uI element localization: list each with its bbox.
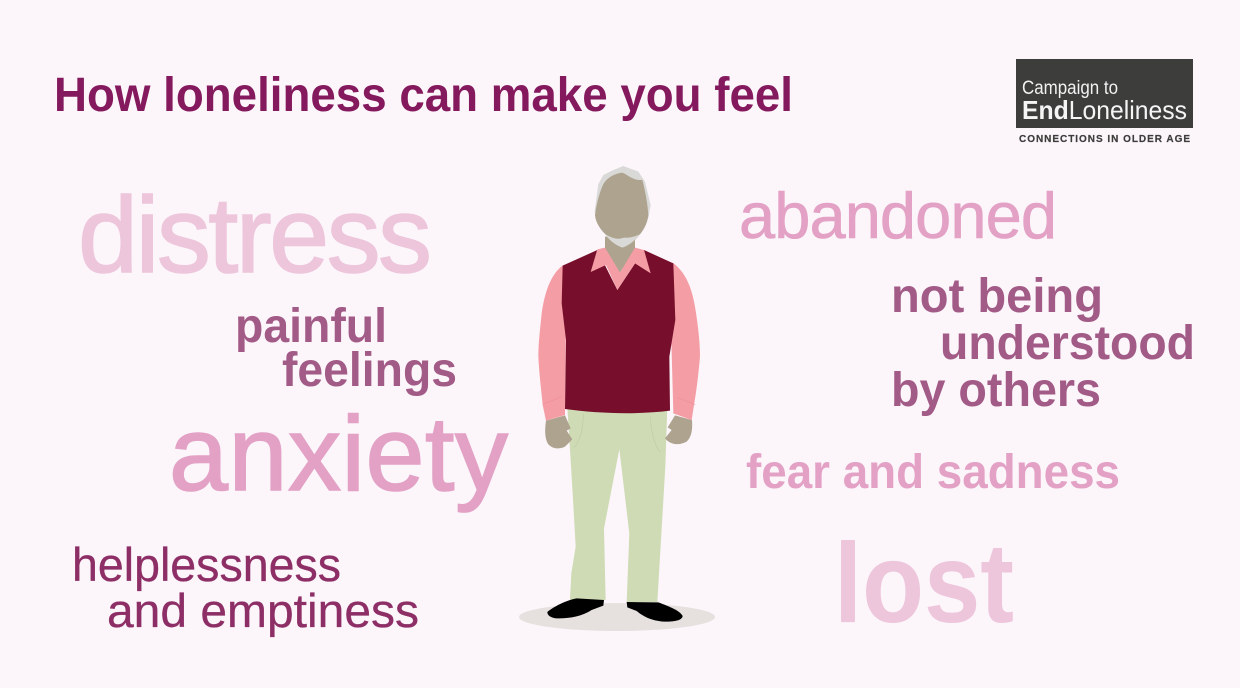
words: painful feelings [235, 300, 457, 397]
sweater vest [562, 250, 675, 413]
word: anxiety: anxiety [169, 395, 508, 513]
words: not being understood by others [891, 270, 1195, 417]
words: painful feelings: painful [235, 300, 387, 353]
hair [594, 166, 651, 218]
words: helplessness and emptiness: helplessness [72, 538, 341, 591]
words: painful feelings: feelings [282, 344, 457, 397]
ground shadow [519, 603, 715, 631]
word: abandoned: abandoned [739, 179, 1057, 252]
shirt collar [591, 248, 651, 290]
words: not being understood by others: not being [891, 270, 1103, 323]
neck [605, 237, 635, 273]
words: helplessness and emptiness: and emptiness [107, 584, 419, 637]
title: How loneliness can make you feel [54, 69, 793, 122]
logo: Campaign to End Loneliness: EndLoneliness [1022, 95, 1187, 125]
words: helplessness and emptiness [72, 538, 419, 637]
logo: Campaign to End Loneliness [1016, 59, 1193, 145]
words: not being understood by others: understood [940, 317, 1195, 370]
right sleeve [671, 263, 700, 420]
shoes [547, 598, 604, 618]
trousers [567, 407, 667, 602]
face [595, 173, 648, 240]
words: fear and sadness: fear and sadness [746, 446, 1120, 499]
words: not being understood by others: by others [891, 364, 1101, 417]
beard [605, 234, 640, 248]
left sleeve [538, 265, 566, 421]
logo: Campaign to End Loneliness: CONNECTIONS IN OLDER AGE [1019, 134, 1190, 145]
pocket lines [574, 413, 660, 452]
cuff lines [543, 397, 695, 405]
logo: Campaign to End Loneliness: Campaign to [1022, 78, 1118, 99]
figure: older man standing [519, 166, 715, 631]
hands [545, 415, 572, 448]
word: distress: distress [78, 174, 432, 295]
word: lost: lost [834, 520, 1014, 646]
